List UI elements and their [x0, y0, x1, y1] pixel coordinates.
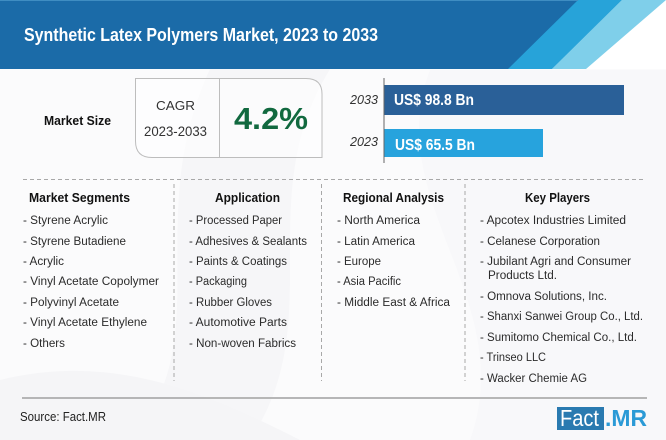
- bar 2023: [349, 129, 543, 157]
- heading: market segments: Market Segments: [29, 191, 130, 205]
- list: regional analysis: - Europe: [337, 256, 381, 268]
- logo: Fact.MR: [557, 405, 647, 431]
- logo: Fact.MR: .MR: [605, 405, 647, 431]
- list: regional analysis: - Middle East & Africa: [337, 297, 451, 309]
- list: key players: - Jubilant Agri and Consumer: [480, 256, 631, 268]
- list: regional analysis: - Asia Pacific: [337, 276, 401, 288]
- CAGR box: [136, 78, 322, 158]
- list: regional analysis: - Latin America: [337, 236, 416, 248]
- list: application: - Packaging: [189, 276, 247, 288]
- list: market segments: - Styrene Acrylic: [23, 215, 108, 227]
- list: market segments: - Polyvinyl Acetate: [23, 297, 119, 309]
- panel: market segments: [23, 191, 159, 350]
- bar 2033: 2033: [349, 92, 379, 107]
- title: Synthetic Latex Polymers Market, 2023 to 2033: [24, 25, 378, 45]
- panel: key players: [480, 191, 643, 385]
- list: market segments: - Styrene Butadiene: [23, 236, 126, 248]
- list: key players: - Sumitomo Chemical Co., Ltd.: [480, 332, 637, 344]
- source note: Source: Fact.MR: [20, 409, 106, 424]
- list: regional analysis: - North America: [337, 215, 421, 227]
- list: market segments: - Acrylic: [23, 256, 64, 268]
- bar 2033: [349, 85, 624, 115]
- CAGR value: 4.2%: [234, 101, 308, 136]
- heading: key players: Key Players: [525, 191, 590, 205]
- list: key players: [480, 215, 643, 385]
- list: key players: - Celanese Corporation: [480, 236, 600, 248]
- bar 2033: US$ 98.8 Bn: [394, 92, 474, 109]
- heading: regional analysis: Regional Analysis: [343, 191, 444, 205]
- list: market segments: - Vinyl Acetate Copolymer: [23, 276, 159, 288]
- CAGR period: 2023-2033: [144, 124, 207, 139]
- list: application: - Processed Paper: [189, 215, 282, 227]
- list: application: - Rubber Gloves: [189, 297, 272, 309]
- list: application: - Paints & Coatings: [189, 256, 287, 268]
- list: regional analysis: [337, 215, 451, 309]
- list: key players: - Wacker Chemie AG: [480, 373, 587, 385]
- list: application: - Non-woven Fabrics: [189, 338, 296, 350]
- list: market segments: - Others: [23, 338, 65, 350]
- bar chart: [349, 78, 624, 163]
- list: key players: - Trinseo LLC: [480, 352, 546, 364]
- panel: regional analysis: [337, 191, 451, 309]
- heading: application: Application: [215, 191, 280, 205]
- list: key players: Products Ltd.: [488, 270, 557, 282]
- list: application: [189, 215, 307, 350]
- market size label: Market Size: [44, 113, 111, 128]
- list: application: - Automotive Parts: [189, 317, 287, 329]
- list: key players: - Shanxi Sanwei Group Co., Ltd.: [480, 311, 643, 323]
- panel: application: [189, 191, 307, 350]
- bar 2023: 2023: [349, 134, 379, 149]
- header banner: [0, 0, 666, 69]
- list: key players: - Apcotex Industries Limited: [480, 215, 626, 227]
- list: market segments: - Vinyl Acetate Ethylene: [23, 317, 147, 329]
- logo: Fact.MR: Fact: [560, 405, 600, 431]
- list: market segments: [23, 215, 159, 350]
- bar 2023: US$ 65.5 Bn: [395, 137, 475, 154]
- CAGR label: CAGR: [156, 98, 195, 113]
- list: application: - Adhesives & Sealants: [189, 236, 307, 248]
- list: key players: - Omnova Solutions, Inc.: [480, 291, 607, 303]
